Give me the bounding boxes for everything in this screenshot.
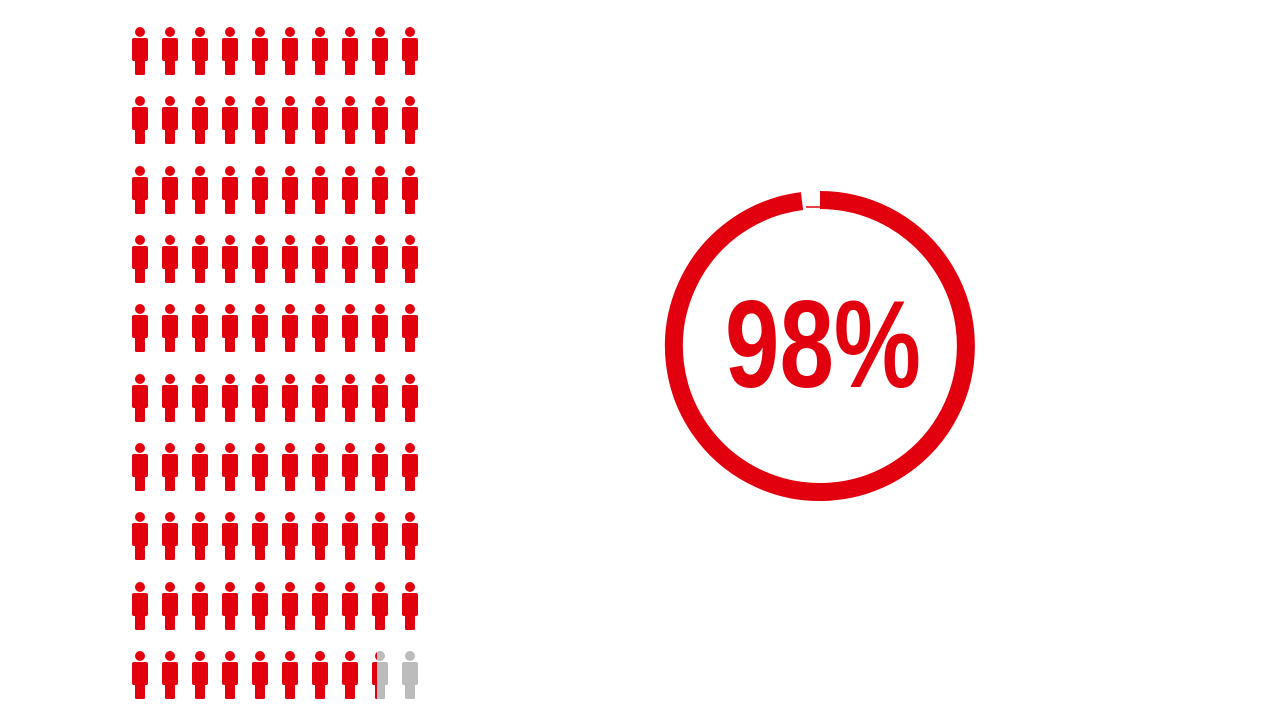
percentage label: 98% [725, 276, 921, 414]
progress ring 98% [674, 200, 966, 492]
pictogram grid: 98 of 100 people [132, 27, 418, 699]
